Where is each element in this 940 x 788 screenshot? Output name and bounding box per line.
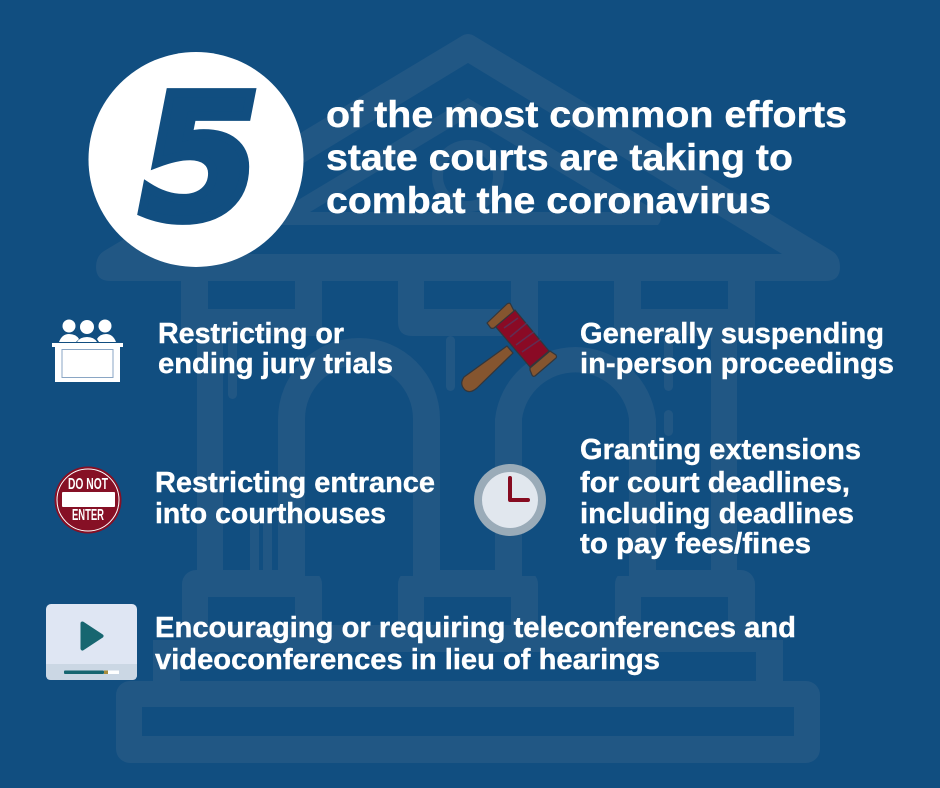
icon: do not enter sign bbox=[54, 466, 122, 534]
title: state courts are taking to bbox=[326, 137, 793, 178]
item text: courthouses: Restricting entrance bbox=[155, 467, 435, 499]
item text: in-person proceedings bbox=[580, 318, 894, 380]
icon: jury box bbox=[52, 320, 123, 382]
icon: gavel bbox=[462, 303, 556, 392]
item text: teleconferences: videoconferences in lieu of hearings bbox=[155, 644, 660, 676]
item text: courthouses bbox=[155, 467, 435, 530]
title: combat the coronavirus bbox=[326, 180, 771, 221]
item text: deadlines: to pay fees/fines bbox=[580, 528, 811, 560]
courthouse background illustration bbox=[96, 34, 840, 763]
item text: in-person proceedings: Generally suspending bbox=[580, 318, 884, 350]
item text: jury trials: ending jury trials bbox=[158, 348, 393, 380]
icon: video player bbox=[46, 604, 137, 680]
item text: teleconferences: Encouraging or requiring teleconferences and bbox=[155, 612, 796, 644]
item text: deadlines: Granting extensions bbox=[580, 434, 861, 466]
white circle with number 5: 5 bbox=[140, 58, 260, 259]
item text: teleconferences bbox=[155, 612, 796, 676]
item text: jury trials: Restricting or bbox=[158, 318, 344, 350]
title bbox=[326, 94, 847, 221]
item text: jury trials bbox=[158, 318, 393, 380]
icon: do not enter sign: DO NOT bbox=[68, 476, 108, 493]
item text: courthouses: into courthouses bbox=[155, 498, 386, 530]
icon: do not enter sign: ENTER bbox=[72, 507, 104, 524]
white circle with number 5 bbox=[88, 52, 304, 267]
title: of the most common efforts bbox=[326, 94, 847, 135]
item text: in-person proceedings: in-person proceedings bbox=[580, 348, 894, 380]
item text: deadlines: for court deadlines, bbox=[580, 467, 850, 499]
icon: clock bbox=[474, 464, 546, 536]
item text: deadlines bbox=[580, 434, 861, 560]
item text: deadlines: including deadlines bbox=[580, 498, 854, 530]
